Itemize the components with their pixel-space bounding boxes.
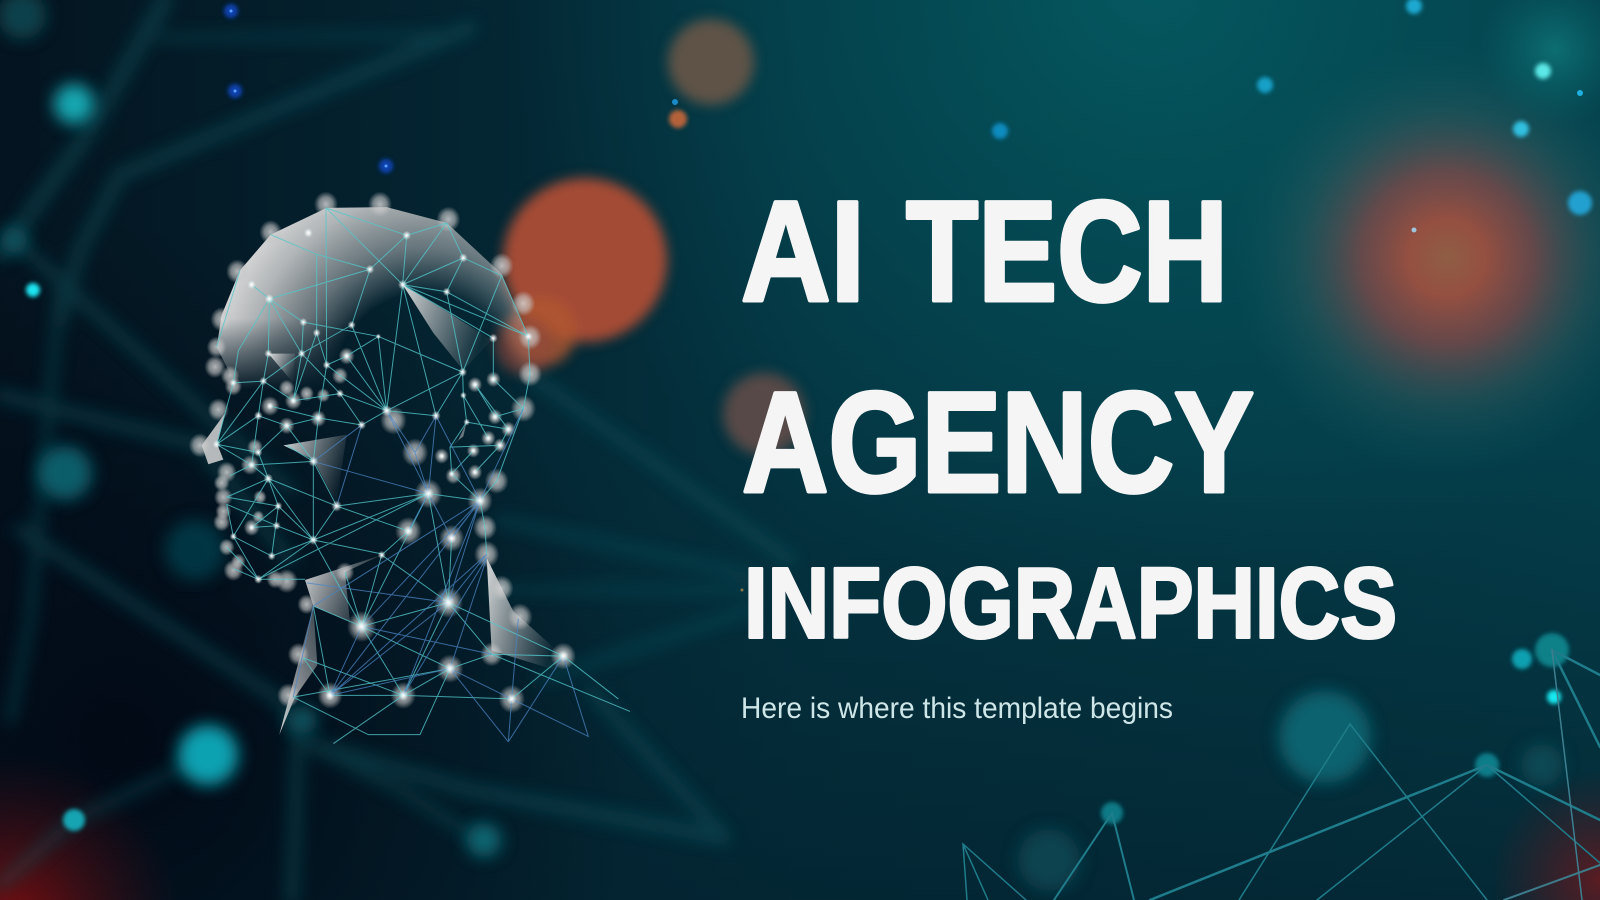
blurred orange and brown bokeh circles: [495, 19, 805, 455]
small glowing dots: [63, 110, 1569, 831]
head outer glowing nodes: [189, 191, 576, 713]
blue and cyan sparks: [26, 0, 1592, 704]
title line: AI TECH: [741, 172, 1228, 332]
title line: AI TECH: AI: [741, 172, 865, 332]
bottom-right network lines: [963, 650, 1600, 900]
head: low-poly wireframe portrait: [189, 191, 630, 744]
blurred background network lines: [0, 0, 790, 900]
head wireframe lines: [217, 208, 630, 744]
title line: AI TECH: TECH: [906, 172, 1228, 332]
subtitle: Here is where this template begins: [741, 692, 1173, 725]
right red glow: [1232, 43, 1600, 473]
title: [741, 172, 1397, 660]
top-right teal glow: [1480, 0, 1600, 125]
title line: INFOGRAPHICS: INFOGRAPHICS: [744, 548, 1397, 660]
head shaded facets: [202, 207, 563, 735]
title line: AGENCY: AGENCY: [742, 364, 1254, 522]
head inner bright nodes: [213, 228, 569, 705]
